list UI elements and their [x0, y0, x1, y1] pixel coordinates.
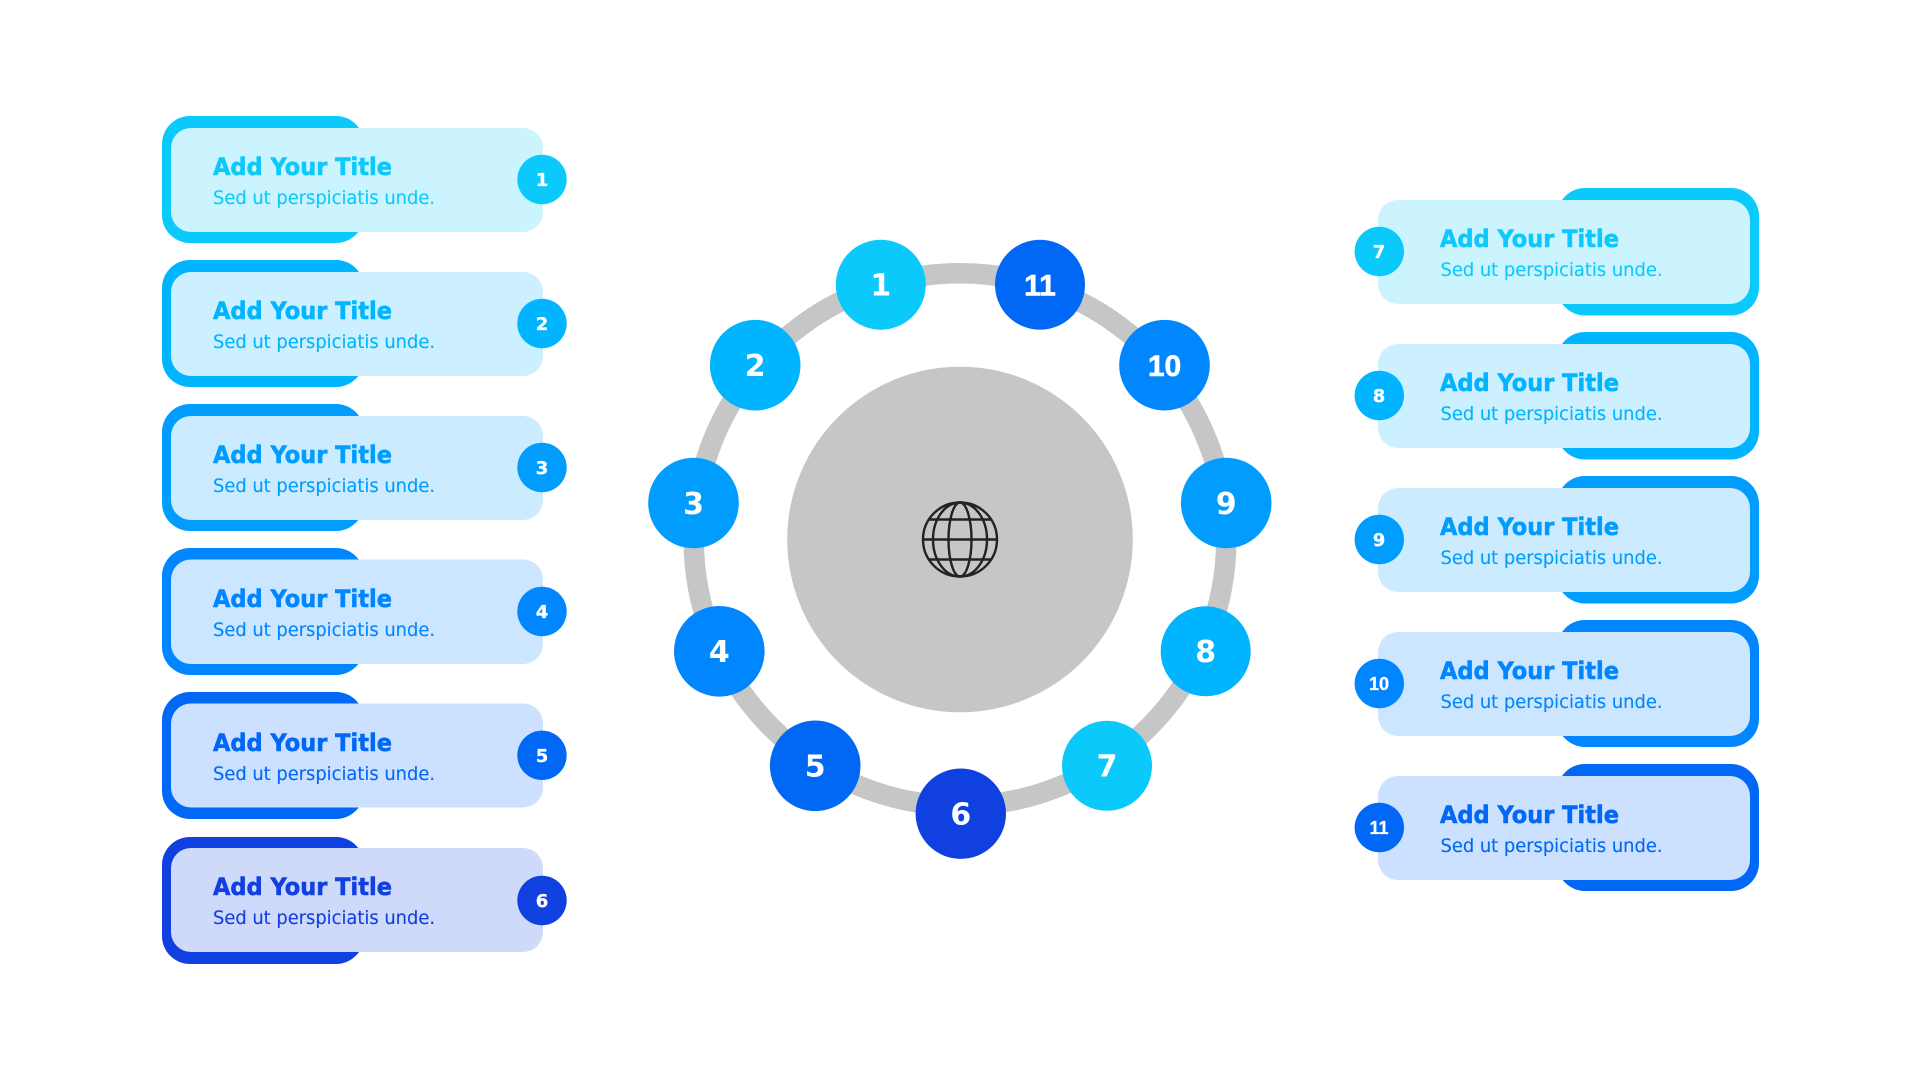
node 4: 4	[709, 635, 730, 670]
heading: card 9 title: Add Your Title	[1440, 513, 1619, 541]
node 3	[648, 458, 739, 548]
badge: number 7: 7	[1373, 242, 1385, 263]
text: card 1 description: Sed ut perspiciatis unde.	[213, 187, 435, 209]
panel: left card 4	[162, 548, 567, 675]
heading: card 3 title: Add Your Title	[213, 441, 392, 469]
heading: card 1 title: Add Your Title	[213, 153, 392, 181]
node 11	[995, 240, 1085, 330]
ring	[694, 273, 1226, 806]
chart: central ring diagram	[648, 240, 1271, 859]
heading: card 7 title: Add Your Title	[1440, 225, 1619, 253]
heading: card 6 title: Add Your Title	[213, 873, 392, 901]
node 2: 2	[745, 349, 766, 384]
heading: card 11 title: Add Your Title	[1440, 801, 1619, 829]
panel: right card 8	[1355, 332, 1759, 460]
panel: right card 10	[1355, 620, 1759, 747]
badge: number 2: 2	[536, 314, 548, 335]
node 1: 1	[870, 268, 891, 304]
badge: number 10: 10	[1369, 674, 1389, 694]
badge: number 11	[1355, 803, 1404, 852]
panel: left card 1	[162, 116, 567, 243]
node 7: 7	[1097, 750, 1117, 784]
text: card 5 description: Sed ut perspiciatis unde.	[213, 763, 435, 785]
panel: left card 3	[162, 404, 567, 531]
text: card 11 description: Sed ut perspiciatis unde.	[1440, 835, 1662, 857]
center disc	[787, 367, 1133, 712]
text: card 3 description: Sed ut perspiciatis unde.	[213, 475, 435, 497]
badge: number 9	[1355, 515, 1404, 564]
text: card 4 description: Sed ut perspiciatis unde.	[213, 619, 435, 641]
badge: number 6	[517, 876, 567, 925]
heading: card 4 title: Add Your Title	[213, 585, 392, 613]
badge: number 5: 5	[536, 746, 548, 767]
node 9	[1181, 458, 1271, 548]
node 9: 9	[1216, 487, 1237, 522]
badge: number 3	[517, 443, 567, 492]
node 11: 11	[1024, 270, 1056, 302]
panel: left card 2	[162, 260, 567, 387]
node 6: 6	[950, 798, 971, 832]
node 10	[1119, 320, 1210, 411]
node 1	[836, 240, 926, 330]
node 8: 8	[1195, 635, 1216, 670]
heading: card 2 title: Add Your Title	[213, 297, 392, 325]
panel: right card 9	[1355, 476, 1759, 604]
node 2	[710, 320, 800, 411]
panel: right card 11	[1355, 764, 1759, 891]
badge: number 10	[1355, 659, 1404, 708]
node 10: 10	[1148, 350, 1181, 383]
badge: number 8: 8	[1373, 386, 1385, 407]
badge: number 1: 1	[536, 170, 548, 191]
badge: number 6: 6	[536, 891, 548, 912]
heading: card 5 title: Add Your Title	[213, 729, 392, 757]
badge: number 8	[1355, 371, 1404, 420]
icon: globe	[923, 502, 997, 576]
badge: number 1	[517, 155, 567, 204]
badge: number 4: 4	[536, 602, 548, 623]
badge: number 5	[517, 731, 567, 780]
heading: card 8 title: Add Your Title	[1440, 369, 1619, 397]
text: card 9 description: Sed ut perspiciatis unde.	[1440, 547, 1662, 569]
node 5: 5	[805, 750, 826, 784]
text: card 8 description: Sed ut perspiciatis unde.	[1440, 403, 1662, 425]
badge: number 4	[517, 587, 567, 636]
text: card 7 description: Sed ut perspiciatis unde.	[1440, 259, 1662, 281]
node 4	[674, 606, 765, 697]
node 8	[1161, 606, 1251, 696]
badge: number 11: 11	[1369, 818, 1389, 838]
text: card 6 description: Sed ut perspiciatis unde.	[213, 907, 435, 929]
panel: right card 7	[1355, 188, 1759, 316]
badge: number 7	[1355, 227, 1404, 276]
node 5	[770, 720, 860, 811]
node 7	[1062, 721, 1152, 811]
heading: card 10 title: Add Your Title	[1440, 657, 1619, 685]
badge: number 2	[517, 299, 567, 348]
node 3: 3	[683, 487, 704, 522]
node 6	[916, 768, 1006, 859]
text: card 2 description: Sed ut perspiciatis unde.	[213, 331, 435, 353]
text: card 10 description: Sed ut perspiciatis unde.	[1440, 691, 1662, 713]
badge: number 3: 3	[536, 458, 548, 479]
panel: left card 6	[162, 837, 567, 964]
badge: number 9: 9	[1373, 530, 1385, 551]
panel: left card 5	[162, 692, 567, 819]
